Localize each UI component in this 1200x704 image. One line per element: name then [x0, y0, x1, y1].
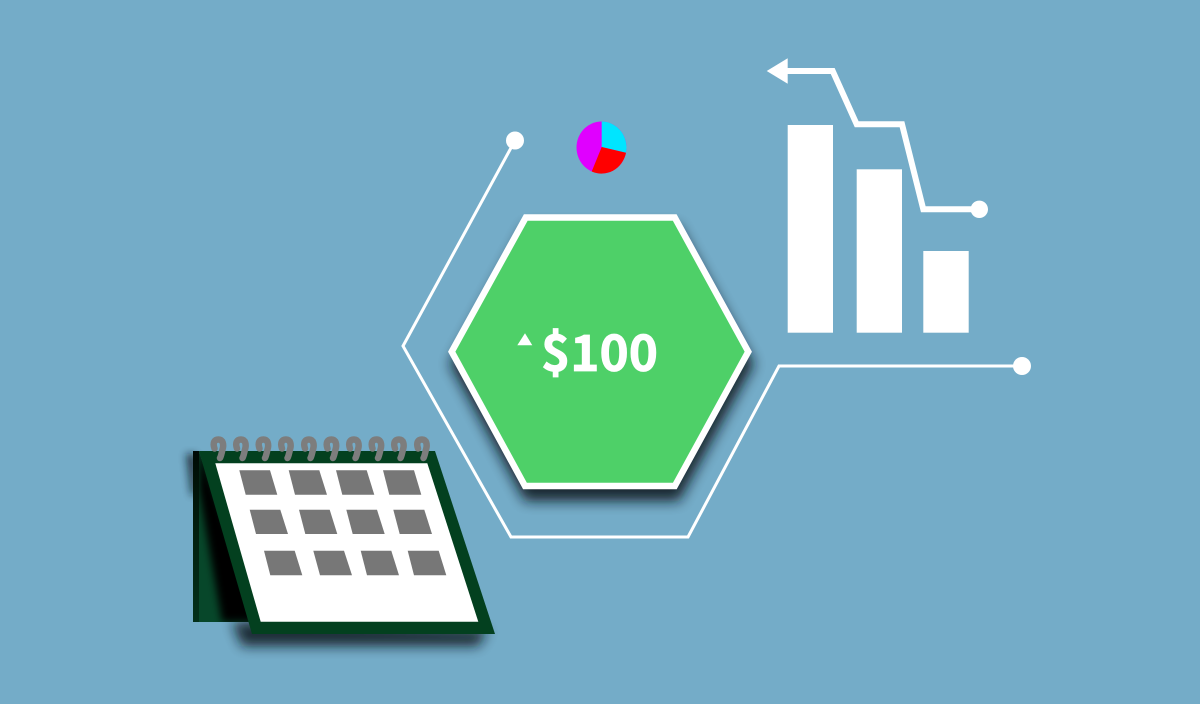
calendar spiral rings: [214, 440, 427, 458]
calendar front frame: [199, 451, 495, 634]
icon: desk calendar: [186, 440, 495, 646]
calendar back panel: [193, 451, 248, 622]
connector line around hexagon: [403, 132, 1031, 537]
calendar date cells: [239, 470, 446, 575]
infographic scene: [181, 58, 1031, 656]
trend arrow: [767, 58, 988, 218]
price value: $100: [541, 314, 658, 386]
bar chart: [788, 125, 969, 333]
calendar shadow: [186, 454, 488, 646]
icon: pie chart: [576, 122, 627, 174]
icon: small triangle: [517, 333, 532, 345]
hexagon price badge: [450, 218, 754, 501]
calendar page: [215, 463, 478, 622]
